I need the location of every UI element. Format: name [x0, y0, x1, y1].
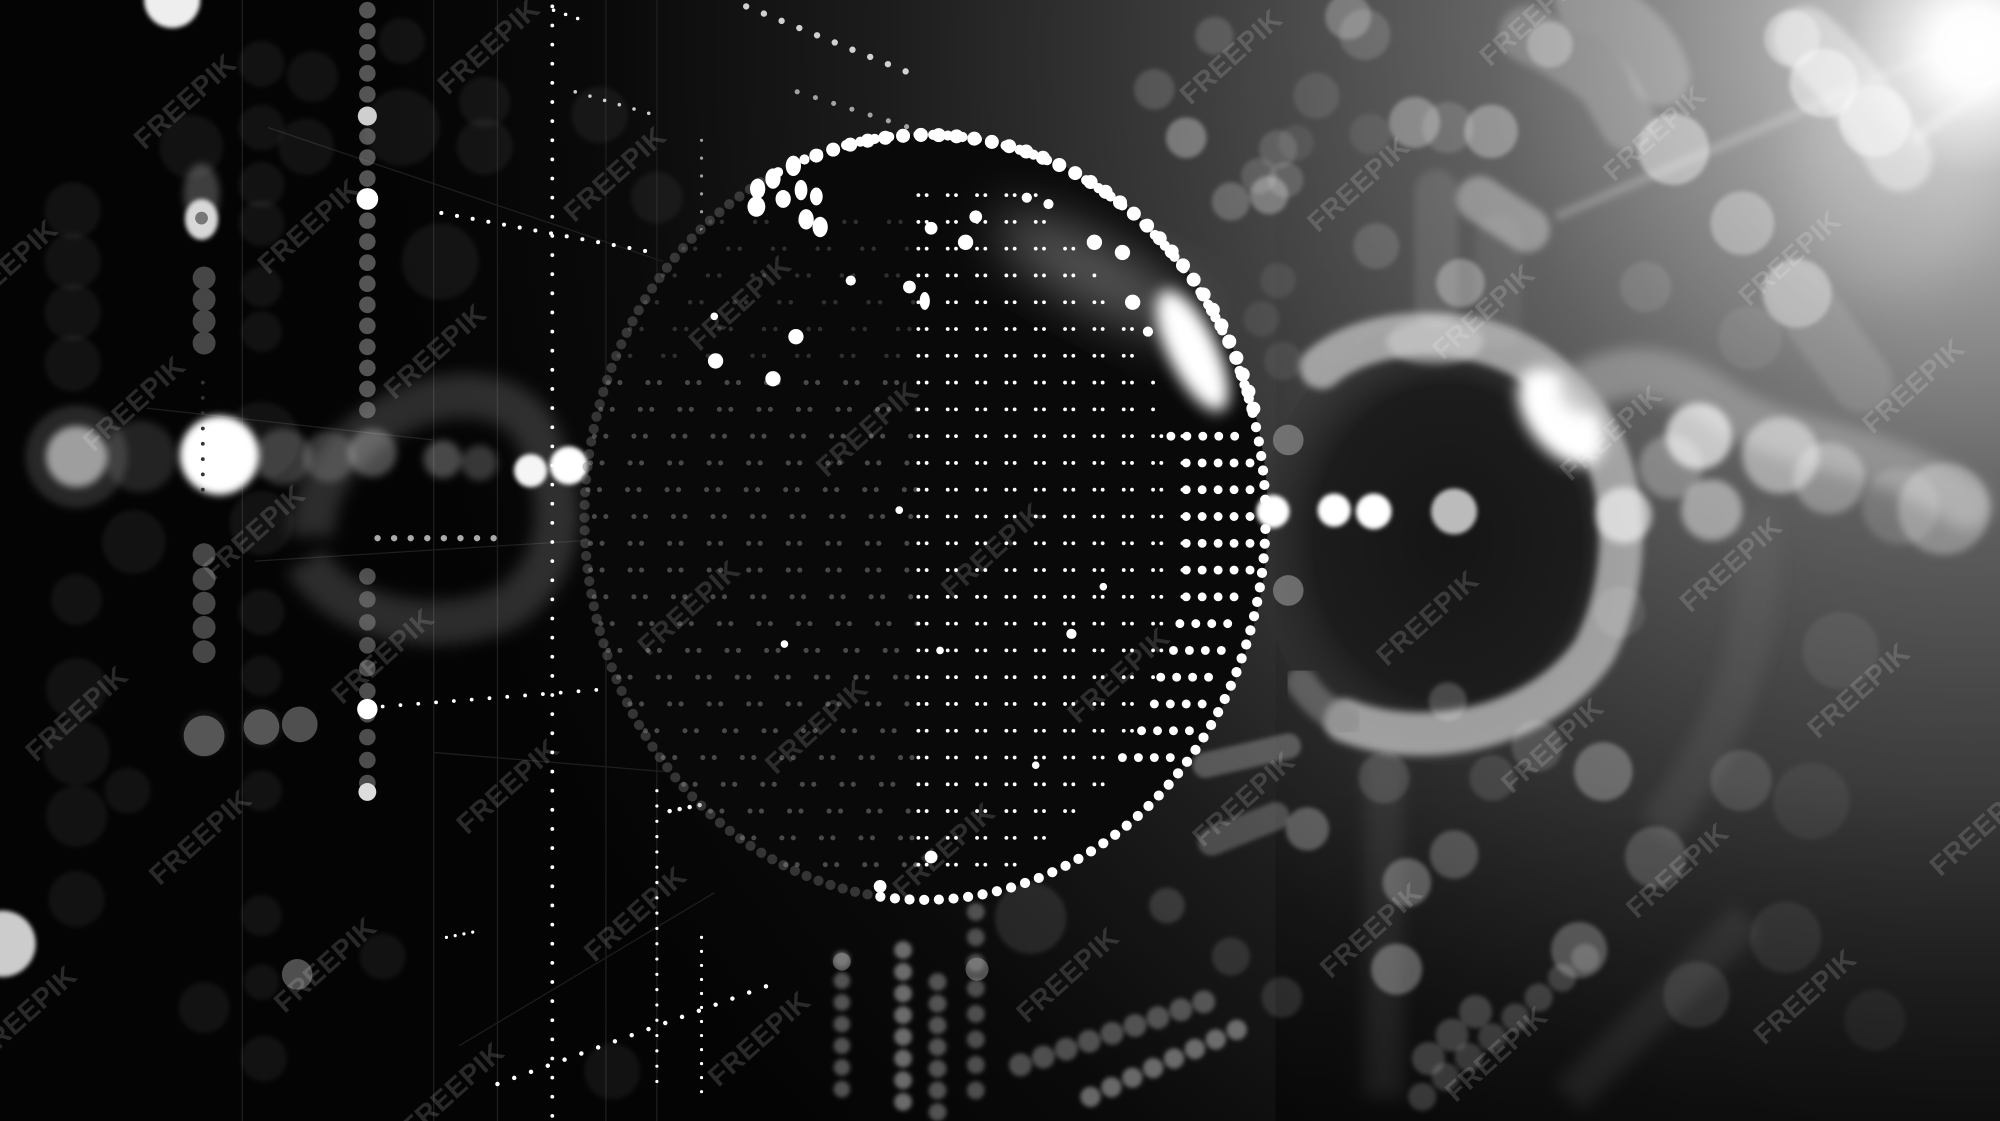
bokeh: upper left field [43, 18, 682, 1099]
watermark text: FREEPIK [268, 911, 382, 1018]
large dim ring on left [306, 396, 557, 623]
upper right bokeh strands [1436, 0, 1901, 383]
watermark text: FREEPIK [1597, 80, 1712, 187]
watermark text: FREEPIK [1426, 258, 1541, 365]
watermark text: FREEPIK [1314, 877, 1428, 984]
sphere [584, 134, 1268, 900]
watermark text: FREEPIK [378, 298, 492, 405]
watermark text: FREEPIK [1439, 1000, 1553, 1108]
watermark text: FREEPIK [19, 660, 134, 767]
dotted bokeh column x=288 [357, 10, 378, 803]
bright vertical capsule [184, 163, 219, 657]
bright right rows [1122, 436, 1256, 758]
watermark text: FREEPIK [128, 48, 242, 155]
watermark text: FREEPIK [1370, 564, 1485, 672]
watermark text: FREEPIK [702, 985, 816, 1092]
watermark text: FREEPIK [1856, 332, 1970, 439]
watermark text: FREEPIK [632, 554, 746, 661]
dim rim [584, 172, 880, 897]
upper right bokeh dots [1134, 0, 1911, 380]
bokeh ring one [1256, 319, 1639, 765]
watermark text: FREEPIK [1732, 205, 1847, 312]
lower bokeh field [842, 746, 1594, 1116]
large upper rim dots [816, 135, 1256, 421]
watermark text: FREEPIK [810, 375, 925, 483]
thin grid lines [147, 0, 714, 1121]
glow on upper right of sphere [980, 191, 1243, 421]
watermark text: FREEPIK [1554, 379, 1668, 487]
lower right bokeh dots [995, 587, 1906, 1051]
dim left rows upper [619, 222, 918, 356]
left edge spot [0, 911, 36, 977]
watermark text: FREEPIK [1801, 637, 1916, 744]
watermark text: FREEPIK [683, 249, 797, 357]
lower soft bands [1384, 752, 1747, 1097]
bokeh ring two and glow row [1584, 373, 1990, 829]
watermark text: FREEPIK [251, 173, 366, 280]
top bokeh spot [144, 0, 200, 28]
watermark text: FREEPIK [1620, 817, 1735, 924]
watermark text: FREEPIK [197, 479, 311, 586]
watermark text: FREEPIK [143, 784, 257, 891]
watermark text: FREEPIK [1674, 511, 1788, 618]
watermark text: FREEPIK [1010, 921, 1125, 1029]
white middle rows [918, 195, 1186, 865]
watermark text: FREEPIK [1301, 131, 1416, 238]
bright rim [778, 135, 1266, 900]
watermark text: FREEPIK [759, 673, 874, 780]
dim left rows lower [588, 383, 918, 865]
watermark text: FREEPIK [1061, 622, 1176, 729]
watermark text: FREEPIK [1748, 943, 1862, 1050]
sphere body [587, 134, 1268, 899]
lens flare top right [1556, 0, 2000, 293]
watermark text: FREEPIK [578, 860, 692, 967]
horizontal bokeh row at left [26, 383, 755, 538]
watermark text: FREEPIK [887, 796, 1001, 904]
watermark text: FREEPIK [325, 602, 440, 710]
watermark text: FREEPIK [77, 350, 191, 457]
bokeh right of sphere [1256, 425, 1477, 606]
watermark text: FREEPIK [935, 497, 1050, 604]
large bright upper dots [708, 156, 1153, 893]
watermark text: FREEPIK [450, 733, 565, 840]
watermark text: FREEPIK [1186, 745, 1301, 853]
watermark text: FREEPIK [1174, 3, 1288, 110]
watermark text: FREEPIK [558, 120, 672, 228]
fine white dotted lines [383, 6, 969, 1121]
watermark text: FREEPIK [1495, 692, 1610, 799]
lower column bokeh near sphere base [184, 707, 989, 990]
